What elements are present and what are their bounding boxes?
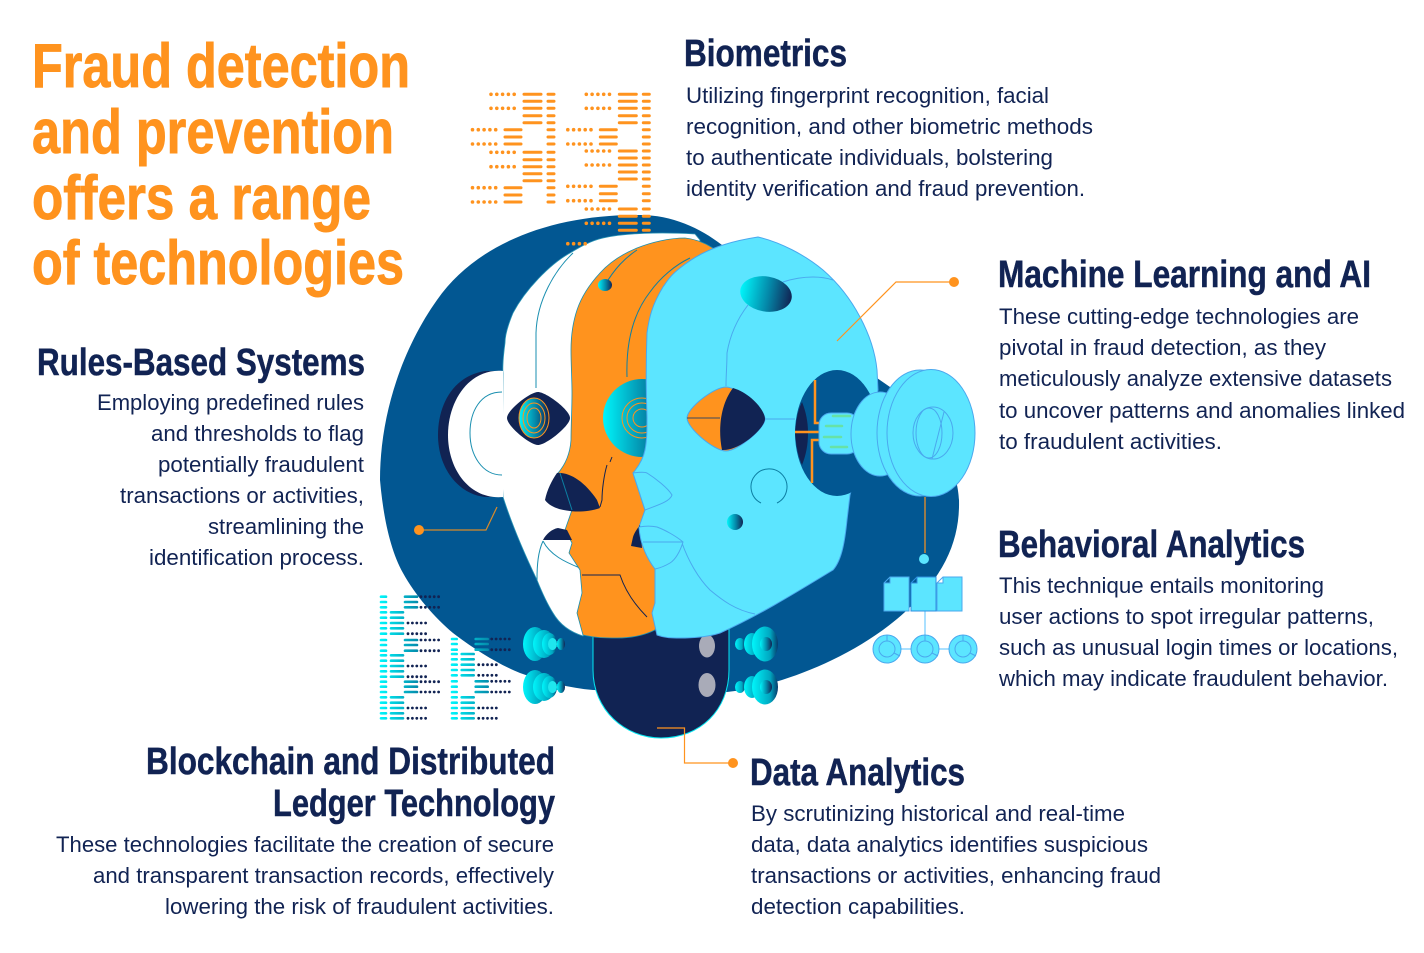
chin ring [751, 469, 787, 503]
body text: streamlining the [208, 514, 364, 539]
body text [686, 83, 1093, 201]
nose and lip [543, 473, 600, 540]
heading: Ledger Technology [273, 783, 555, 825]
panel: blockchain and distributed ledger technology [56, 741, 555, 919]
body text: detection capabilities. [751, 894, 965, 919]
body text: Employing predefined rules [97, 390, 364, 415]
body text: user actions to spot irregular patterns, [999, 604, 1374, 629]
eye: cyan face [687, 387, 765, 451]
body text [998, 573, 1398, 691]
title: offers a range [32, 164, 371, 233]
body text: potentially fraudulent [158, 452, 365, 477]
eye: orange face [603, 379, 681, 457]
body text: identity verification and fraud prevention. [686, 176, 1085, 201]
behavioral flow diagram: documents and nodes [873, 497, 977, 663]
body text: identification process. [149, 545, 364, 570]
heading: Behavioral Analytics [998, 524, 1305, 566]
orange face contour lines [560, 250, 690, 510]
body text: such as unusual login times or locations, [999, 635, 1398, 660]
ear [438, 371, 503, 497]
callout: data analytics leader line [657, 728, 738, 768]
title: and prevention [32, 98, 394, 167]
body text: recognition, and other biometric methods [686, 114, 1093, 139]
cable plug [819, 413, 859, 454]
body text: meticulously analyze extensive datasets [999, 366, 1392, 391]
cyan face contour lines [682, 277, 833, 614]
body text: transactions or activities, [120, 483, 364, 508]
cyan binary code pattern [381, 597, 513, 718]
body text: lowering the risk of fraudulent activities. [165, 894, 554, 919]
cyan nose [633, 472, 672, 510]
orange forehead oval [598, 279, 612, 291]
body text: This technique entails monitoring [999, 573, 1324, 598]
panel: machine learning and AI [998, 254, 1405, 454]
title: Fraud detection [32, 32, 410, 101]
cyan face layer [633, 237, 878, 638]
orange face layer [558, 238, 720, 638]
panel: central robot head illustration [380, 215, 977, 738]
eye: white face [507, 392, 570, 445]
body text: By scrutinizing historical and real-time [751, 801, 1125, 826]
cheek opening [795, 370, 879, 496]
heading: Rules-Based Systems [37, 342, 365, 384]
body text: These technologies facilitate the creation of secure [56, 832, 554, 857]
panel: rules-based systems [37, 342, 365, 570]
cyan forehead oval [737, 272, 795, 316]
body text [999, 304, 1405, 454]
body text: to fraudulent activities. [999, 429, 1222, 454]
body text: and transparent transaction records, effectively [93, 863, 555, 888]
neck [593, 620, 729, 738]
head silhouette [380, 215, 959, 692]
right neck bolts [735, 626, 778, 704]
title: of technologies [32, 229, 404, 298]
body text [97, 390, 365, 570]
body text [751, 801, 1161, 919]
ear knob [851, 370, 975, 496]
panel: biometrics [684, 33, 1093, 201]
cheek dot [727, 514, 743, 530]
body text: Utilizing fingerprint recognition, facial [686, 83, 1049, 108]
white face layer [502, 233, 700, 636]
callout: rules-based leader line [414, 507, 497, 535]
body text: transactions or activities, enhancing fraud [751, 863, 1161, 888]
body text: to uncover patterns and anomalies linked [999, 398, 1405, 423]
heading: Biometrics [684, 33, 847, 75]
white face contour lines [536, 253, 580, 580]
left neck bolts [523, 627, 565, 704]
body text: and thresholds to flag [151, 421, 364, 446]
callout: machine learning leader line [837, 277, 959, 341]
body text [56, 832, 555, 919]
heading: Blockchain and Distributed [146, 741, 555, 783]
body text: These cutting-edge technologies are [999, 304, 1359, 329]
panel: data analytics [750, 752, 1161, 919]
body text: data, data analytics identifies suspicious [751, 832, 1148, 857]
body text: which may indicate fraudulent behavior. [998, 666, 1388, 691]
body text: to authenticate individuals, bolstering [686, 145, 1053, 170]
heading: Data Analytics [750, 752, 965, 794]
orange binary code pattern [472, 94, 649, 244]
lips [631, 525, 683, 569]
panel: behavioral analytics [998, 524, 1398, 691]
title [32, 32, 410, 298]
heading [146, 741, 555, 825]
body text: pivotal in fraud detection, as they [999, 335, 1327, 360]
